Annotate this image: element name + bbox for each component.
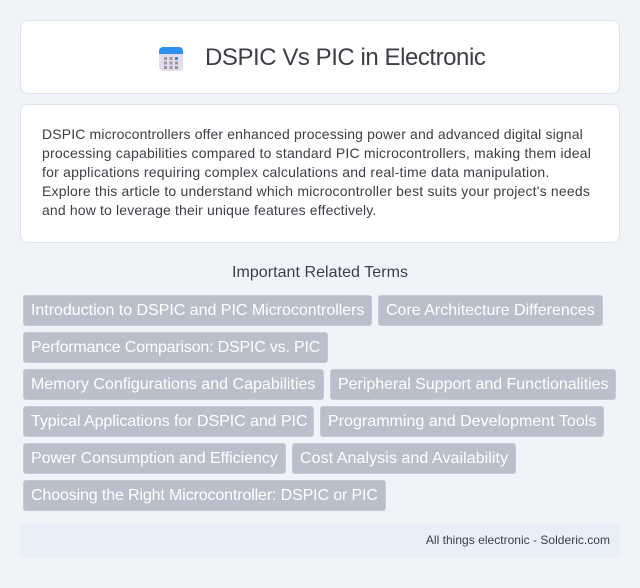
tag: peripheral	[330, 369, 616, 400]
heading: related terms: Important Related Terms	[232, 264, 408, 281]
tag: programming: Programming and Development Tools	[328, 413, 596, 430]
intro text: processing capabilities compared to standard PIC microcontrollers, making them ideal	[42, 145, 591, 161]
tag: cost	[292, 443, 516, 474]
footer	[20, 524, 620, 558]
tag: applications	[23, 406, 314, 437]
tag: architecture	[378, 295, 603, 326]
intro text: for applications requiring complex calculations and real-time data manipulation.	[42, 164, 550, 180]
tag: power: Power Consumption and Efficiency	[31, 450, 278, 467]
intro card	[20, 104, 620, 243]
tag: performance	[23, 332, 328, 363]
tag: applications: Typical Applications for DSPIC and PIC	[31, 413, 307, 430]
intro text: Explore this article to understand which microcontroller best suits your project's needs	[42, 183, 590, 199]
tag: cost: Cost Analysis and Availability	[300, 450, 508, 467]
tag: power	[23, 443, 286, 474]
footer credit: All things electronic - Solderic.com	[426, 533, 610, 547]
intro text	[42, 126, 591, 218]
intro text: and how to leverage their unique features effectively.	[42, 202, 376, 218]
title: DSPIC Vs PIC in Electronic	[205, 44, 485, 71]
tag: introduction	[23, 295, 372, 326]
tag: memory: Memory Configurations and Capabilities	[31, 376, 315, 393]
tag: peripheral: Peripheral Support and Functionalities	[338, 376, 609, 393]
tag: performance: Performance Comparison: DSPIC vs. PIC	[31, 339, 320, 356]
tag: introduction: Introduction to DSPIC and PIC Microcontrollers	[31, 302, 364, 319]
tag: memory	[23, 369, 324, 400]
title card	[20, 20, 620, 94]
icon: calendar	[159, 47, 183, 71]
tag: architecture: Core Architecture Differences	[386, 302, 595, 319]
tag: choosing	[23, 480, 386, 511]
tag: choosing: Choosing the Right Microcontroller: DSPIC or PIC	[31, 487, 378, 504]
intro text: DSPIC microcontrollers offer enhanced processing power and advanced digital signal	[42, 126, 583, 142]
tag: programming	[320, 406, 604, 437]
tag list	[23, 295, 616, 511]
